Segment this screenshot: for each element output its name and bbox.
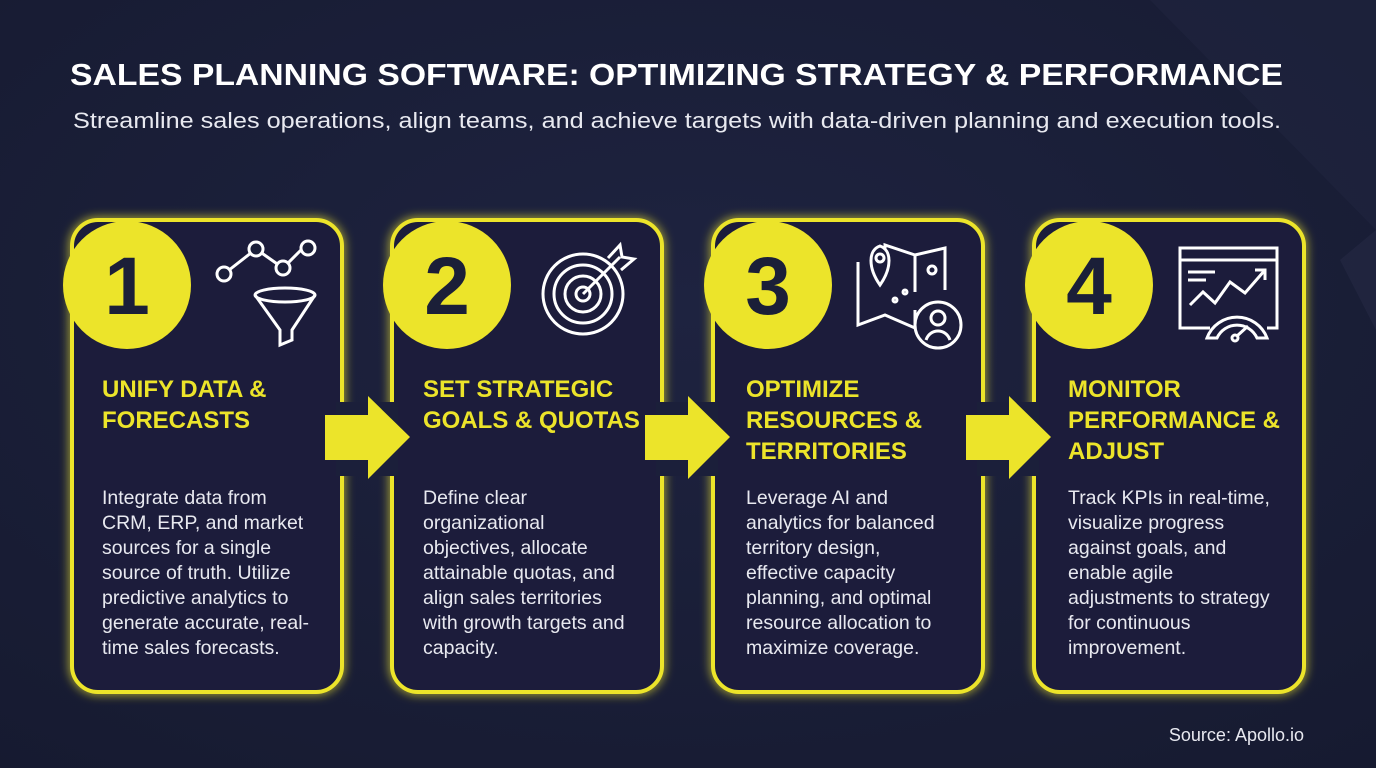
panel: step 1: UNIFY DATA & <box>102 376 266 403</box>
panel: step 2: GOALS & QUOTAS <box>423 407 640 434</box>
panel: step 1 <box>63 220 342 692</box>
panel: step 4: adjustments to strategy <box>1068 587 1270 609</box>
panel: step 3: TERRITORIES <box>746 438 907 465</box>
panel: step 2: capacity. <box>423 637 499 659</box>
panel: step 4: for continuous <box>1068 612 1191 634</box>
panel: step 1: time sales forecasts. <box>102 637 280 659</box>
panel: step 3: OPTIMIZE <box>746 376 859 403</box>
panel: step 3: resource allocation to <box>746 612 932 634</box>
arrow 3 <box>966 396 1051 479</box>
panel: step 3: 3 <box>745 241 791 332</box>
panel: step 2: align sales territories <box>423 587 602 609</box>
panel: step 3: RESOURCES & <box>746 407 922 434</box>
panel: step 4: visualize progress <box>1068 512 1224 534</box>
panel: step 1: sources for a single <box>102 537 271 559</box>
source: Source: Apollo.io <box>1169 725 1304 745</box>
panel: step 1: source of truth. Utilize <box>102 562 291 584</box>
panel: step 4: PERFORMANCE & <box>1068 407 1280 434</box>
panel: step 4 <box>1025 220 1304 692</box>
panel: step 3: territory design, <box>746 537 880 559</box>
panel: step 4: MONITOR <box>1068 376 1181 403</box>
panel: step 1: CRM, ERP, and market <box>102 512 304 534</box>
icon: chart and funnel <box>217 241 315 345</box>
panel: step 2: objectives, allocate <box>423 537 588 559</box>
panel: step 2: Define clear <box>423 487 528 509</box>
icon: dashboard <box>1180 248 1277 341</box>
panel: step 4: 4 <box>1066 241 1112 332</box>
panel: step 2: organizational <box>423 512 544 534</box>
panel: step 1: predictive analytics to <box>102 587 289 609</box>
panel: step 1: generate accurate, real- <box>102 612 309 634</box>
panel: step 4: enable agile <box>1068 562 1173 584</box>
panel: step 3 <box>704 220 983 692</box>
panel: step 1: Integrate data from <box>102 487 267 509</box>
panel: step 3: Leverage AI and <box>746 487 888 509</box>
panel: step 2: 2 <box>424 241 470 332</box>
panel: step 1: 1 <box>104 241 150 332</box>
panel: step 4: Track KPIs in real-time, <box>1068 487 1270 509</box>
icon: target <box>543 245 634 334</box>
arrow 2 <box>645 396 730 479</box>
panel: step 2: SET STRATEGIC <box>423 376 613 403</box>
panel: step 4: improvement. <box>1068 637 1186 659</box>
panel: step 3: analytics for balanced <box>746 512 935 534</box>
panel: step 2: with growth targets and <box>422 612 625 634</box>
panel: step 3: planning, and optimal <box>746 587 931 609</box>
panel: step 4: against goals, and <box>1068 537 1226 559</box>
arrow 1 <box>325 396 410 479</box>
panel: step 4: ADJUST <box>1068 438 1164 465</box>
panel: step 2 <box>383 220 662 692</box>
subtitle: Streamline sales operations, align teams, and achieve targets with data-driven planning and execution tools. <box>73 108 1281 133</box>
panel: step 1: FORECASTS <box>102 407 250 434</box>
panel: step 2: attainable quotas, and <box>423 562 615 584</box>
icon: map and person <box>858 245 961 348</box>
panel: step 3: effective capacity <box>746 562 895 584</box>
title: SALES PLANNING SOFTWARE: OPTIMIZING STRATEGY & PERFORMANCE <box>70 57 1283 92</box>
panel: step 3: maximize coverage. <box>746 637 919 659</box>
